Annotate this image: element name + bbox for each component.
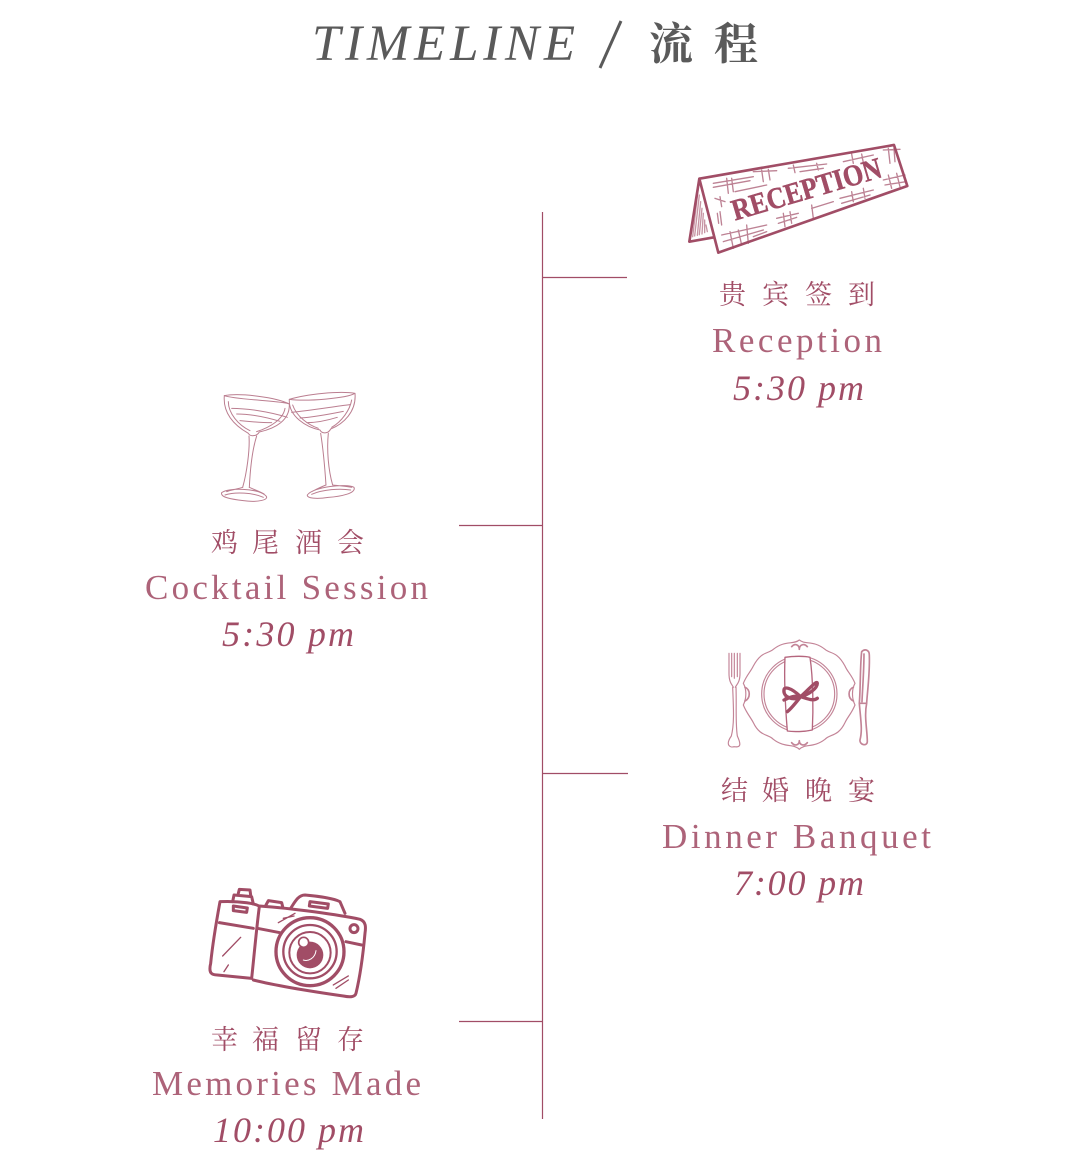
text: dinner: 7:00 pm xyxy=(734,863,864,903)
text: reception: Reception xyxy=(712,321,882,360)
title xyxy=(312,8,758,72)
text: dinner: Dinner Banquet xyxy=(662,817,931,856)
text: cocktail: 酒 xyxy=(295,528,322,558)
text: dinner: 结 xyxy=(721,776,748,806)
text: memories xyxy=(152,1025,421,1150)
text: cocktail: 5:30 pm xyxy=(222,614,354,654)
text: reception: 5:30 pm xyxy=(733,368,864,408)
text: dinner: 晚 xyxy=(805,776,832,806)
text: memories: 福 xyxy=(252,1025,279,1055)
text: cocktail: Cocktail Session xyxy=(145,568,428,607)
text: memories: 存 xyxy=(337,1025,364,1055)
text: cocktail: 鸡 xyxy=(211,528,238,558)
icon: dinner plate xyxy=(728,640,869,749)
text: reception xyxy=(712,280,882,408)
text: memories: 10:00 pm xyxy=(213,1110,364,1150)
text: reception: 签 xyxy=(805,280,832,310)
timeline axis with branches xyxy=(459,212,628,1119)
title: TIMELINE xyxy=(312,16,575,72)
text: memories: 幸 xyxy=(211,1025,238,1055)
text: dinner: 婚 xyxy=(762,776,789,806)
text: reception: 宾 xyxy=(762,280,789,310)
icon: coupe glasses xyxy=(222,392,355,501)
text: cocktail: 会 xyxy=(337,528,364,558)
title: 流 xyxy=(649,8,694,72)
icon: reception table card xyxy=(689,145,907,253)
title: 程 xyxy=(714,8,758,72)
text: cocktail xyxy=(145,528,428,654)
text: reception: 贵 xyxy=(719,280,748,310)
text: memories: Memories Made xyxy=(152,1064,421,1103)
text: dinner xyxy=(662,776,931,903)
text: dinner: 宴 xyxy=(848,776,875,806)
icon: camera xyxy=(210,889,365,997)
icon: reception table card: RECEPTION xyxy=(728,152,886,227)
text: cocktail: 尾 xyxy=(252,528,279,558)
text: reception: 到 xyxy=(848,280,875,310)
text: memories: 留 xyxy=(295,1025,322,1055)
